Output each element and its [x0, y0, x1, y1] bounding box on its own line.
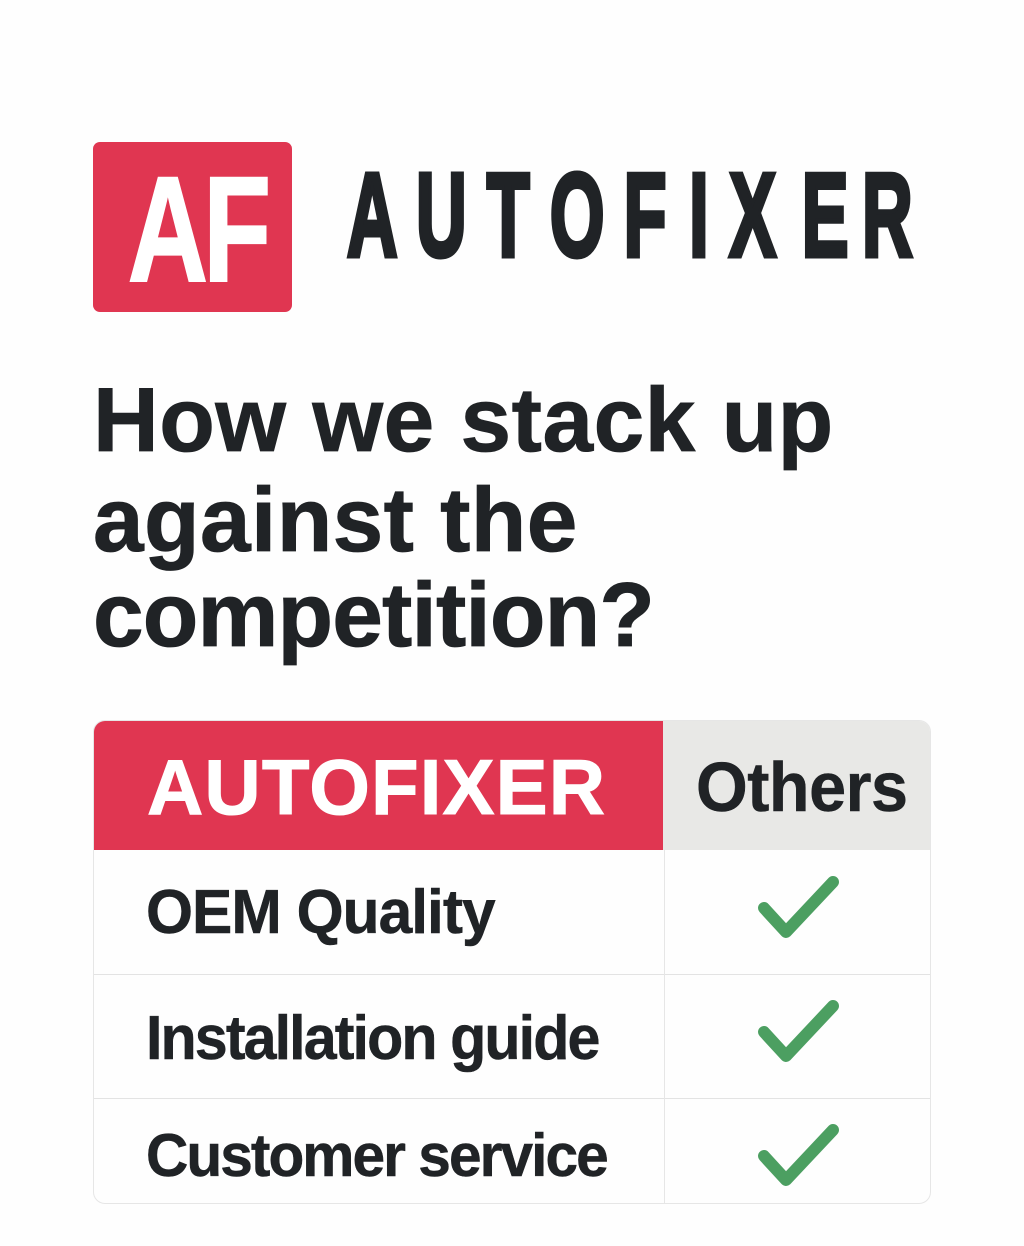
row: Installation guide: Installation guide [146, 1004, 598, 1073]
table header: AUTOFIXER [93, 720, 663, 850]
icon: green check [758, 876, 839, 938]
table header: Others [663, 720, 932, 850]
row: Customer service [146, 1122, 839, 1189]
heading: How we stack up [93, 370, 834, 471]
row: Customer service: Customer service [146, 1122, 607, 1189]
column divider [664, 850, 665, 1205]
row: Installation guide [93, 975, 931, 1099]
brand wordmark: AUTOFIXER [347, 150, 913, 280]
table header: Others: Others [696, 748, 907, 826]
logo: AF red badge: AF [128, 146, 271, 312]
row: OEM Quality: OEM Quality [146, 878, 495, 947]
icon: green check [758, 1000, 839, 1062]
table header: AUTOFIXER: AUTOFIXER [147, 743, 606, 831]
row: OEM Quality [93, 850, 931, 975]
heading: competition? [93, 565, 654, 666]
heading [93, 370, 834, 666]
comparison table [93, 720, 931, 1204]
heading: against the [93, 470, 578, 571]
icon: green check [758, 1124, 839, 1186]
